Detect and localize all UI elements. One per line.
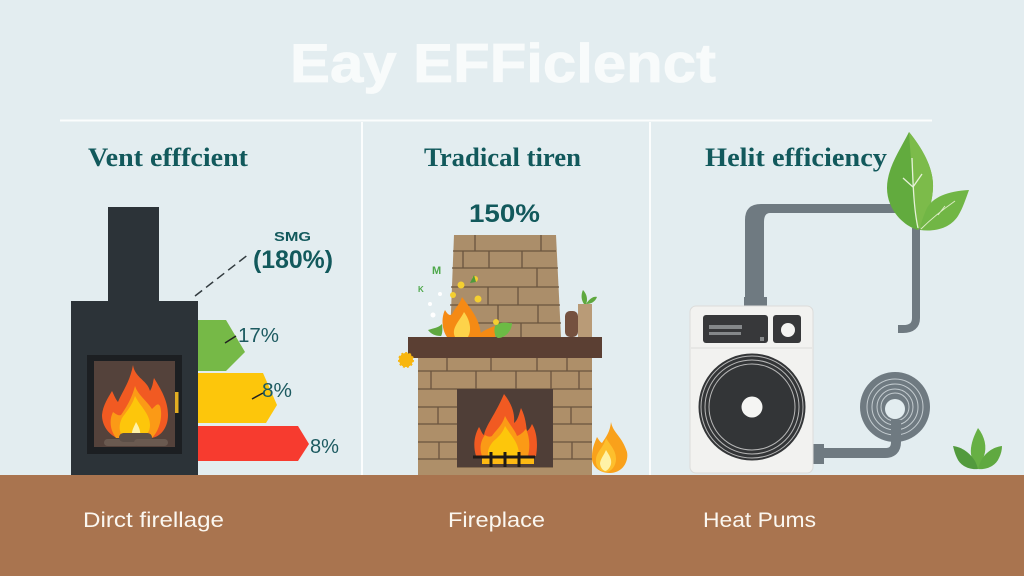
mantel leaves and sparks: M — [432, 265, 441, 277]
upper pipe — [745, 204, 895, 300]
bar value: 17%: 17% — [238, 325, 279, 347]
mantel — [408, 337, 602, 358]
chimney — [450, 235, 561, 337]
icon: brick fireplace — [399, 235, 602, 475]
lower brick surround — [418, 358, 592, 475]
coil connector pipe — [815, 420, 896, 453]
fireplace flame — [474, 394, 537, 464]
title: Eay EFFiclenct — [290, 32, 716, 94]
mantel vases — [565, 290, 597, 337]
ground band — [0, 475, 1024, 576]
heading: vent: Vent efffcient — [88, 143, 248, 172]
bar value: 8% yellow: 8% — [262, 380, 292, 402]
heading: heat efficiency: Helit efficiency — [705, 143, 887, 172]
fan — [698, 354, 806, 460]
yellow bar — [198, 373, 277, 423]
logs — [104, 433, 168, 446]
side flame — [592, 422, 627, 473]
icon: heat pump unit — [690, 306, 813, 473]
stove flame — [102, 365, 168, 438]
green bar — [198, 320, 245, 371]
icon: large leaves — [887, 132, 969, 230]
small leaf — [920, 190, 969, 230]
mantel leaves and sparks — [418, 265, 512, 338]
control panel — [703, 315, 801, 343]
red bar — [198, 426, 309, 461]
heading: traditional: Tradical tiren — [424, 143, 582, 172]
icon: wood stove — [71, 207, 198, 475]
firebox — [457, 389, 553, 467]
callout: SMG 180%: SMG — [274, 229, 311, 244]
label: fireplace: Fireplace — [448, 509, 545, 532]
large leaf — [887, 132, 933, 230]
coil — [860, 372, 930, 442]
label: heat pump: Heat Pums — [703, 509, 816, 532]
dashed leader — [195, 254, 249, 296]
fireplace value: 150% — [469, 200, 540, 228]
efficiency bars — [198, 320, 309, 461]
grate — [473, 452, 535, 467]
spark star — [399, 353, 413, 367]
callout: SMG 180% — [253, 229, 333, 274]
right pipe — [898, 228, 916, 329]
mantel leaves and sparks: K — [418, 285, 424, 294]
label: stove: Dirct firellage — [83, 509, 224, 532]
bar value: 8% red: 8% — [310, 436, 339, 458]
callout: SMG 180%: (180%) — [253, 246, 333, 274]
icon: small plant — [953, 428, 1002, 469]
mantel flame — [443, 297, 497, 337]
